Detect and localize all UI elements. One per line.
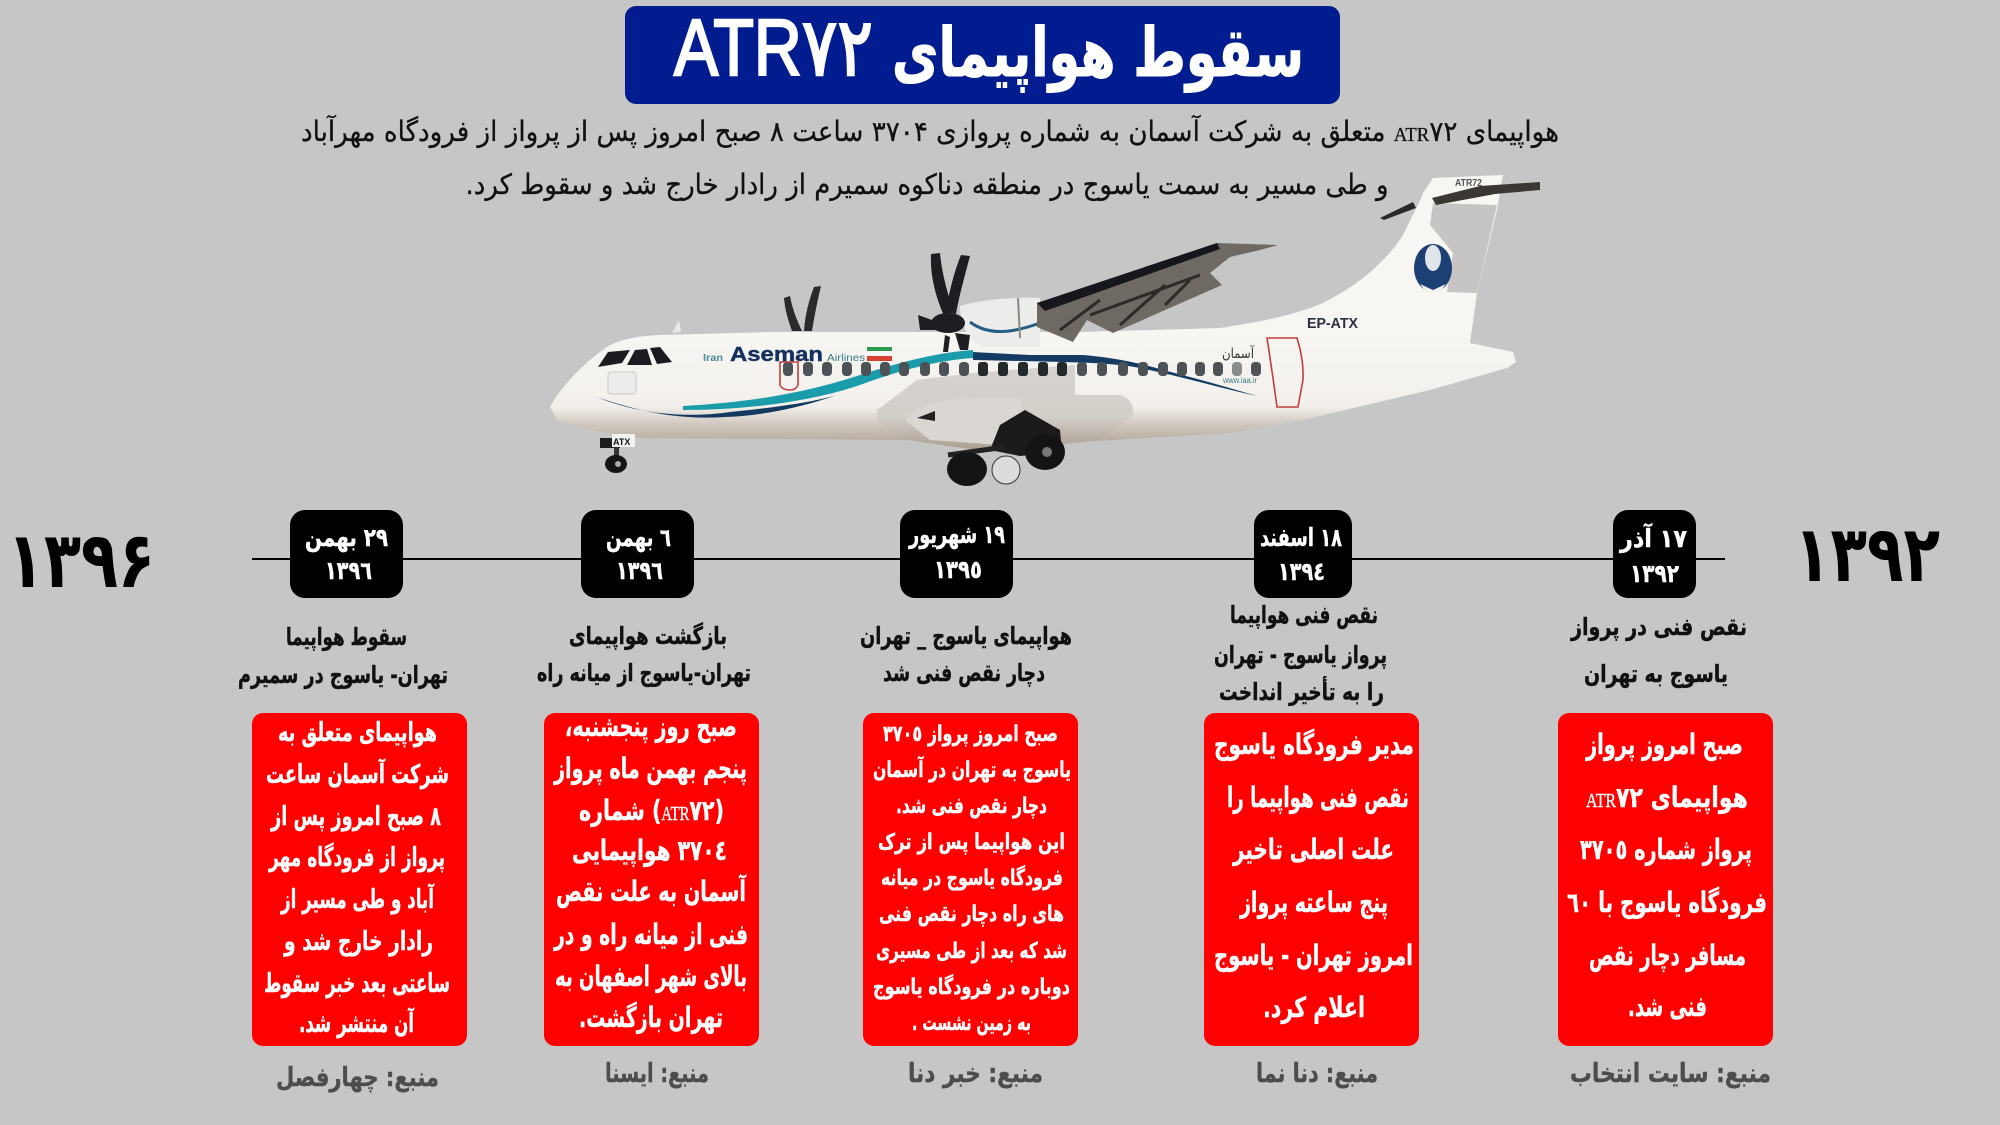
rudder shade (1430, 203, 1497, 293)
title banner: سقوط هواپیمای (892, 14, 1304, 93)
red description card: رادار خارج شد و (283, 927, 433, 957)
panel: event 17 Azar 1392 (1558, 510, 1773, 1089)
cockpit windows (598, 347, 672, 367)
date badge: ۱۷ آذر (1618, 523, 1687, 553)
red description card: فنی شد. (1628, 990, 1707, 1023)
aircraft markings: Iran (703, 353, 723, 364)
panel: event 19 Shahrivar 1395 (860, 510, 1078, 1089)
red description card: (ATR۷۲) شماره (579, 794, 724, 827)
event heading: تهران-یاسوج از میانه راه (537, 659, 751, 687)
red description card: پنج ساعته پرواز (1239, 886, 1388, 919)
red description card (863, 713, 1078, 1046)
near propeller (918, 253, 970, 352)
red description card: ساعتی بعد خبر سقوط (264, 969, 450, 999)
red description card: صبح امروز پرواز ٣٧٠٥ (883, 722, 1058, 747)
red description card: علت اصلی تاخیر (1232, 833, 1394, 866)
event heading (1214, 601, 1387, 706)
doors (780, 338, 1303, 407)
aircraft markings: آسمان (1222, 345, 1255, 362)
event heading: نقص فنی هواپیما (1230, 601, 1378, 629)
event heading (238, 623, 448, 689)
red description card: مسافر دچار نقص (1589, 939, 1746, 972)
red description card: امروز تهران - یاسوج (1214, 939, 1413, 973)
panel: event 29 Bahman 1396 (238, 510, 467, 1093)
red description card: تهران بازگشت. (579, 1001, 723, 1034)
red description card: های راه دچار نقص فنی (879, 902, 1064, 927)
antenna (672, 320, 681, 333)
date badge: ۲۹ بهمن (305, 523, 388, 553)
watermark stamp (992, 456, 1020, 484)
aircraft markings: ATX (613, 437, 630, 447)
date badge: ٦ بهمن (606, 523, 671, 553)
nose panel (608, 372, 636, 394)
livery swooshes (597, 350, 1257, 418)
date badge: ۱۸ اسفند (1260, 523, 1342, 552)
title banner (625, 3, 1340, 104)
fuselage and fin (550, 175, 1516, 450)
aircraft markings: ATR72 (1455, 178, 1482, 189)
red description card: پنجم بهمن ماه پرواز (553, 752, 747, 785)
red description card: شرکت آسمان ساعت (266, 758, 449, 790)
airplane illustration (550, 175, 1540, 486)
red description card: اعلام کرد. (1263, 991, 1365, 1024)
red description card: مدیر فرودگاه یاسوج (1214, 728, 1414, 762)
event heading (537, 622, 751, 687)
red description card: صبح امروز پرواز (1585, 728, 1743, 761)
date badge: ١٣٩٤ (1278, 557, 1325, 586)
date badge (1613, 510, 1696, 598)
red description card: شد که بعد از طی مسیری (876, 939, 1067, 964)
tail logo (1414, 244, 1452, 292)
red description card: آباد و طی مسیر از (280, 883, 435, 915)
wing-root shadow and lower fairing (877, 365, 1133, 452)
red description card: بالای شهر اصفهان به (555, 960, 747, 993)
red description card (1204, 713, 1419, 1046)
aircraft markings: EP-ATX (1307, 315, 1358, 332)
source: منبع: دنا نما (1256, 1059, 1378, 1089)
event heading: هواپیمای یاسوج _ تهران (860, 622, 1072, 650)
event heading: یاسوج به تهران (1584, 660, 1728, 688)
source: منبع: چهارفصل (276, 1063, 439, 1093)
red description card (252, 713, 467, 1046)
tailplane (1432, 182, 1540, 205)
far propeller (784, 286, 821, 331)
cabin windows (783, 362, 1261, 376)
event heading: دچار نقص فنی شد (883, 659, 1045, 687)
red description card: آسمان به علت نقص (556, 874, 747, 908)
red description card: به زمین نشست . (912, 1011, 1031, 1036)
panel: event 6 Bahman 1396 (537, 510, 759, 1089)
title banner: ATR۷۲ (674, 3, 873, 92)
date badge (581, 510, 694, 598)
red description card: ٣٧٠٤ هواپیمایی (572, 834, 727, 867)
intro text: هواپیمای ATR۷۲ متعلق به شرکت آسمان به شماره پروازی ۳۷۰۴ ساعت ۸ صبح امروز پس از پرواز از فرودگاه مهرآباد (301, 115, 1559, 148)
event heading: بازگشت هواپیمای (569, 622, 727, 650)
far-side nacelle (960, 298, 1040, 347)
aircraft markings: Airlines (827, 353, 865, 364)
red description card: هواپیمای ATR۷۲ (1586, 781, 1748, 814)
red description card: هواپیمای متعلق به (278, 718, 437, 748)
red description card: این هواپیما پس از ترک (878, 830, 1065, 855)
red description card: فرودگاه یاسوج در میانه (881, 864, 1063, 891)
wing (1037, 243, 1278, 342)
date badge (1254, 510, 1352, 598)
panel: event 18 Esfand 1394 (1204, 510, 1419, 1089)
date badge: ١٣٩٦ (616, 556, 663, 585)
red description card: فنی از میانه راه و در (553, 918, 748, 951)
event heading: را به تأخیر انداخت (1219, 676, 1384, 706)
date badge: ١٣٩٥ (934, 555, 982, 584)
timeline axis (252, 558, 1725, 560)
red description card: دوباره در فرودگاه یاسوج (873, 973, 1070, 1000)
year label 1392: ۱۳۹۲ (1794, 510, 1940, 600)
year label 1396: ۱۳۹۶ (7, 516, 155, 606)
aircraft markings (613, 178, 1482, 447)
landing gear (600, 410, 1065, 486)
event heading (860, 622, 1072, 687)
event heading: پرواز یاسوج - تهران (1214, 641, 1387, 669)
red description card: صبح روز پنجشنبه، (565, 710, 737, 743)
red description card: آن منتشر شد. (299, 1007, 415, 1039)
rear tailplane (1380, 202, 1416, 220)
red description card: نقص فنی هواپیما را (1227, 781, 1409, 814)
source: منبع: ایسنا (605, 1059, 709, 1089)
red description card: یاسوج به تهران در آسمان (873, 755, 1071, 783)
date badge (900, 510, 1013, 598)
red description card (544, 710, 759, 1046)
red description card: پرواز شماره ٣٧٠٥ (1580, 833, 1752, 866)
aircraft markings: www.iaa.ir (1222, 376, 1257, 385)
date badge: ۱۳۹۲ (1630, 559, 1679, 588)
source: منبع: سایت انتخاب (1570, 1059, 1771, 1089)
event heading (1570, 613, 1747, 688)
red description card: فرودگاه یاسوج با ٦٠ (1567, 886, 1767, 920)
aircraft markings: Aseman (730, 344, 823, 366)
date badge: ١٣٩٦ (325, 556, 372, 585)
event heading: سقوط هواپیما (286, 623, 407, 651)
source: منبع: خبر دنا (908, 1059, 1043, 1089)
red description card: ۸ صبح امروز پس از (270, 802, 441, 832)
red description card: پرواز از فرودگاه مهر (268, 842, 445, 873)
intro text: و طی مسیر به سمت یاسوج در منطقه دناکوه سمیرم از رادار خارج شد و سقوط کرد. (466, 168, 1388, 202)
date badge (290, 510, 403, 598)
event heading: نقص فنی در پرواز (1570, 613, 1747, 641)
flag (867, 347, 892, 361)
event heading: تهران- یاسوج در سمیرم (238, 661, 448, 689)
date badge: ۱۹ شهریور (908, 520, 1005, 550)
red description card: دچار نقص فنی شد. (896, 794, 1047, 819)
intro text (301, 115, 1559, 202)
red description card (1558, 713, 1773, 1046)
